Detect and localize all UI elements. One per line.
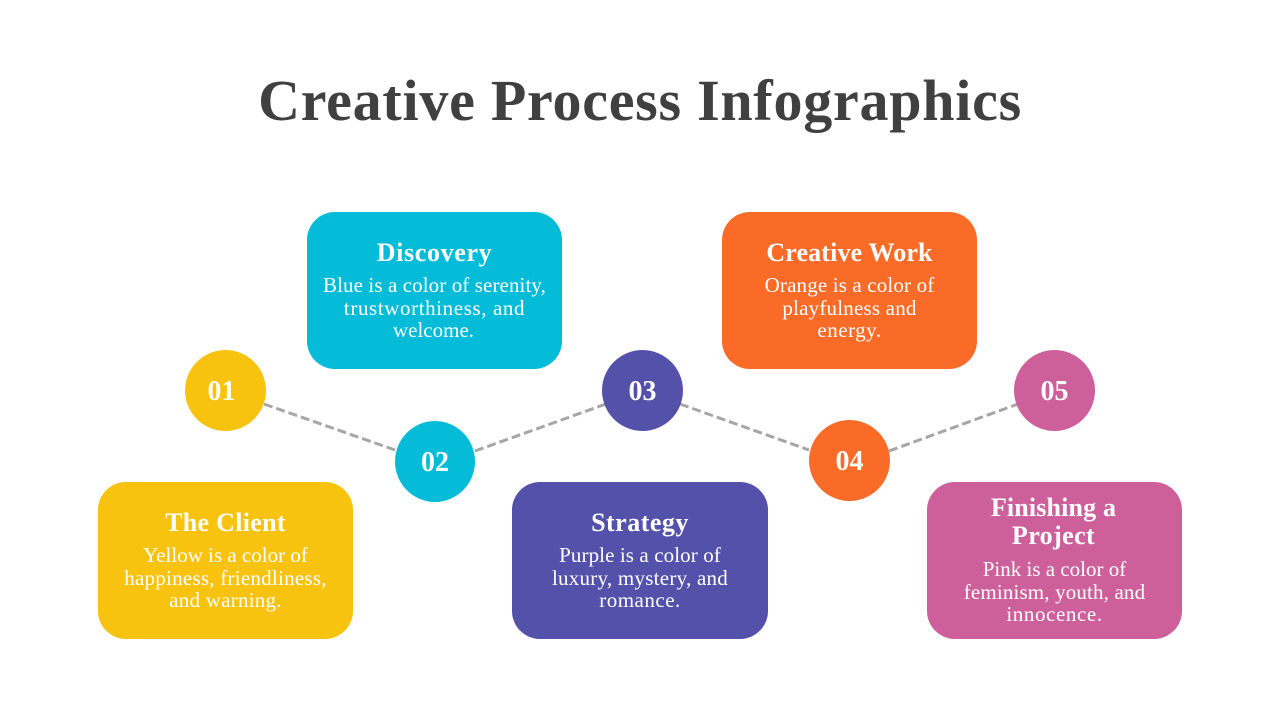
step circle 01 [185, 350, 266, 431]
text: Strategy description: Purple is a color of [559, 543, 721, 567]
text: Strategy description: luxury, mystery, and [552, 566, 728, 590]
text: Finishing a Project description: Pink is a color of [983, 557, 1126, 581]
text: The Client description: Yellow is a color of [143, 543, 308, 567]
text: Discovery description [323, 273, 546, 342]
step circle 01: 01 [208, 376, 236, 407]
text: Finishing a Project description: innocence. [1006, 602, 1103, 626]
text: Creative Work description: energy. [817, 318, 882, 342]
text: Creative Work description [765, 273, 934, 342]
panel: Strategy [512, 482, 768, 639]
text: Strategy description [552, 543, 728, 612]
step circle 02: 02 [421, 447, 449, 478]
text: Discovery description: Blue is a color of serenity, [323, 273, 546, 297]
heading: Finishing a Project: Project [1012, 521, 1095, 550]
text: The Client description: and warning. [169, 588, 282, 612]
heading: Strategy: Strategy [591, 508, 689, 537]
step circle 04 [809, 420, 890, 501]
heading: The Client: The Client [165, 508, 286, 537]
text: Discovery description: welcome. [393, 318, 474, 342]
heading: Finishing a Project [991, 493, 1116, 550]
text: Finishing a Project description [964, 557, 1145, 626]
step circle 05 [1014, 350, 1095, 431]
title: Creative Process Infographics [258, 68, 1022, 133]
panel: The Client [98, 482, 353, 639]
step circle 04: 04 [836, 446, 864, 477]
text: Creative Work description: playfulness and [782, 296, 917, 320]
heading: Finishing a Project: Finishing a [991, 493, 1116, 522]
text: The Client description [124, 543, 327, 612]
step circle 05: 05 [1040, 376, 1068, 407]
text: Finishing a Project description: feminism, youth, and [964, 580, 1145, 604]
panel: Finishing a Project [927, 482, 1182, 639]
panel: Discovery [307, 212, 562, 369]
step circle 02 [395, 421, 475, 502]
text: Strategy description: romance. [599, 588, 681, 612]
heading: Discovery: Discovery [377, 238, 492, 267]
text: Discovery description: trustworthiness, and [344, 296, 525, 320]
step circle 03: 03 [628, 376, 656, 407]
heading: Creative Work: Creative Work [766, 238, 933, 267]
text: Creative Work description: Orange is a color of [765, 273, 934, 297]
panel: Creative Work [722, 212, 977, 369]
step circle 03 [602, 350, 683, 431]
text: The Client description: happiness, friendliness, [124, 566, 327, 590]
